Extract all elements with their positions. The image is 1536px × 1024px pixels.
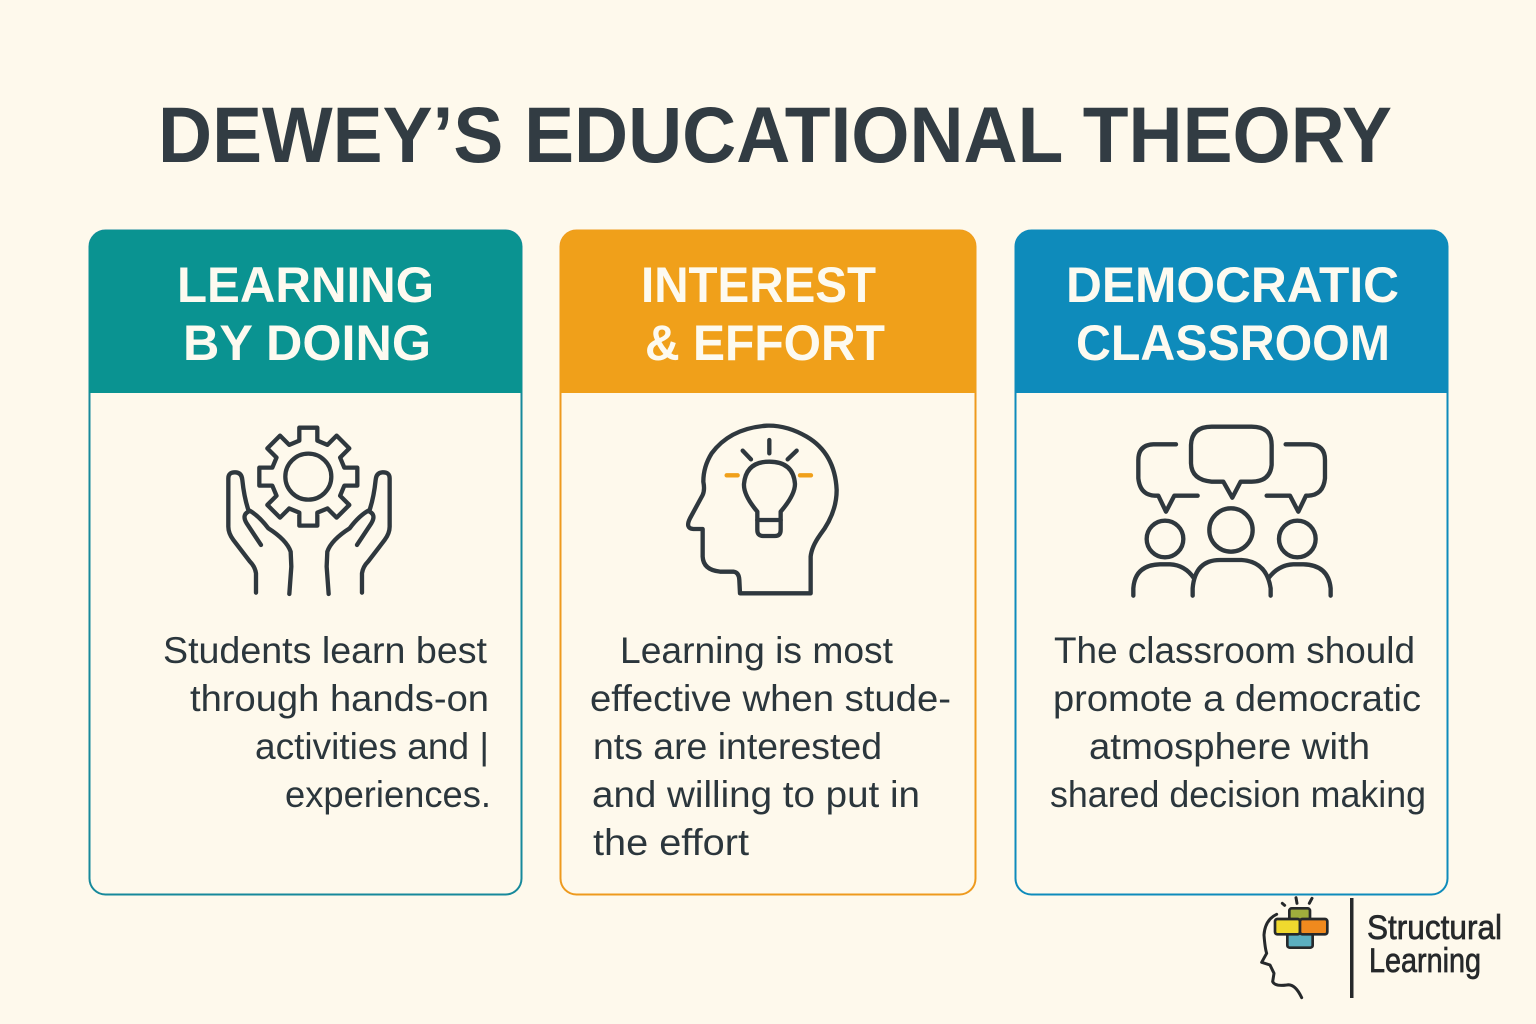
icon: head with light bulb <box>688 426 837 593</box>
text: democratic classroom description: shared decision making <box>1050 774 1426 815</box>
text: democratic classroom description: promote a democratic <box>1053 678 1421 719</box>
text: learning by doing description: activities and | <box>255 726 489 767</box>
icon: people with speech bubbles <box>1133 427 1331 596</box>
logo: Structural Learning <box>1262 898 1502 998</box>
logo text: Learning <box>1369 942 1481 980</box>
icon: hands holding gear <box>228 428 390 594</box>
header band: democratic classroom <box>1015 230 1448 393</box>
text: interest and effort description: Learning is most <box>620 630 894 671</box>
text: democratic classroom description <box>1050 630 1426 815</box>
heading: democratic classroom: CLASSROOM <box>1076 315 1390 371</box>
title: DEWEY’S EDUCATIONAL THEORY <box>158 90 1392 179</box>
text: learning by doing description: through hands-on <box>190 678 489 719</box>
heading: learning by doing: LEARNING <box>177 257 434 313</box>
text: interest and effort description <box>590 630 951 863</box>
heading: democratic classroom <box>1066 257 1399 371</box>
heading: interest and effort: INTEREST <box>641 257 876 313</box>
panel: interest and effort <box>560 230 976 894</box>
text: learning by doing description <box>163 630 491 815</box>
panel: learning by doing <box>89 230 522 894</box>
text: interest and effort description: nts are interested <box>593 726 882 767</box>
heading: interest and effort <box>641 257 885 371</box>
header band: learning by doing <box>89 230 522 393</box>
heading: democratic classroom: DEMOCRATIC <box>1066 257 1399 313</box>
text: interest and effort description: effective when stude- <box>590 678 951 719</box>
text: interest and effort description: the effort <box>593 822 750 863</box>
logo text <box>1367 909 1502 980</box>
text: democratic classroom description: atmosphere with <box>1089 726 1370 767</box>
text: learning by doing description: experiences. <box>285 774 491 815</box>
text: democratic classroom description: The classroom should <box>1054 630 1415 671</box>
heading: interest and effort: & EFFORT <box>645 315 885 371</box>
text: learning by doing description: Students learn best <box>163 630 488 671</box>
divider <box>1350 898 1354 998</box>
header band: interest and effort <box>560 230 976 393</box>
text: interest and effort description: and willing to put in <box>592 774 920 815</box>
logo text: Structural <box>1367 909 1502 947</box>
heading: learning by doing <box>177 257 434 371</box>
panel: democratic classroom <box>1015 230 1448 894</box>
heading: learning by doing: BY DOING <box>183 315 431 371</box>
icon: head with coloured blocks <box>1262 898 1327 998</box>
